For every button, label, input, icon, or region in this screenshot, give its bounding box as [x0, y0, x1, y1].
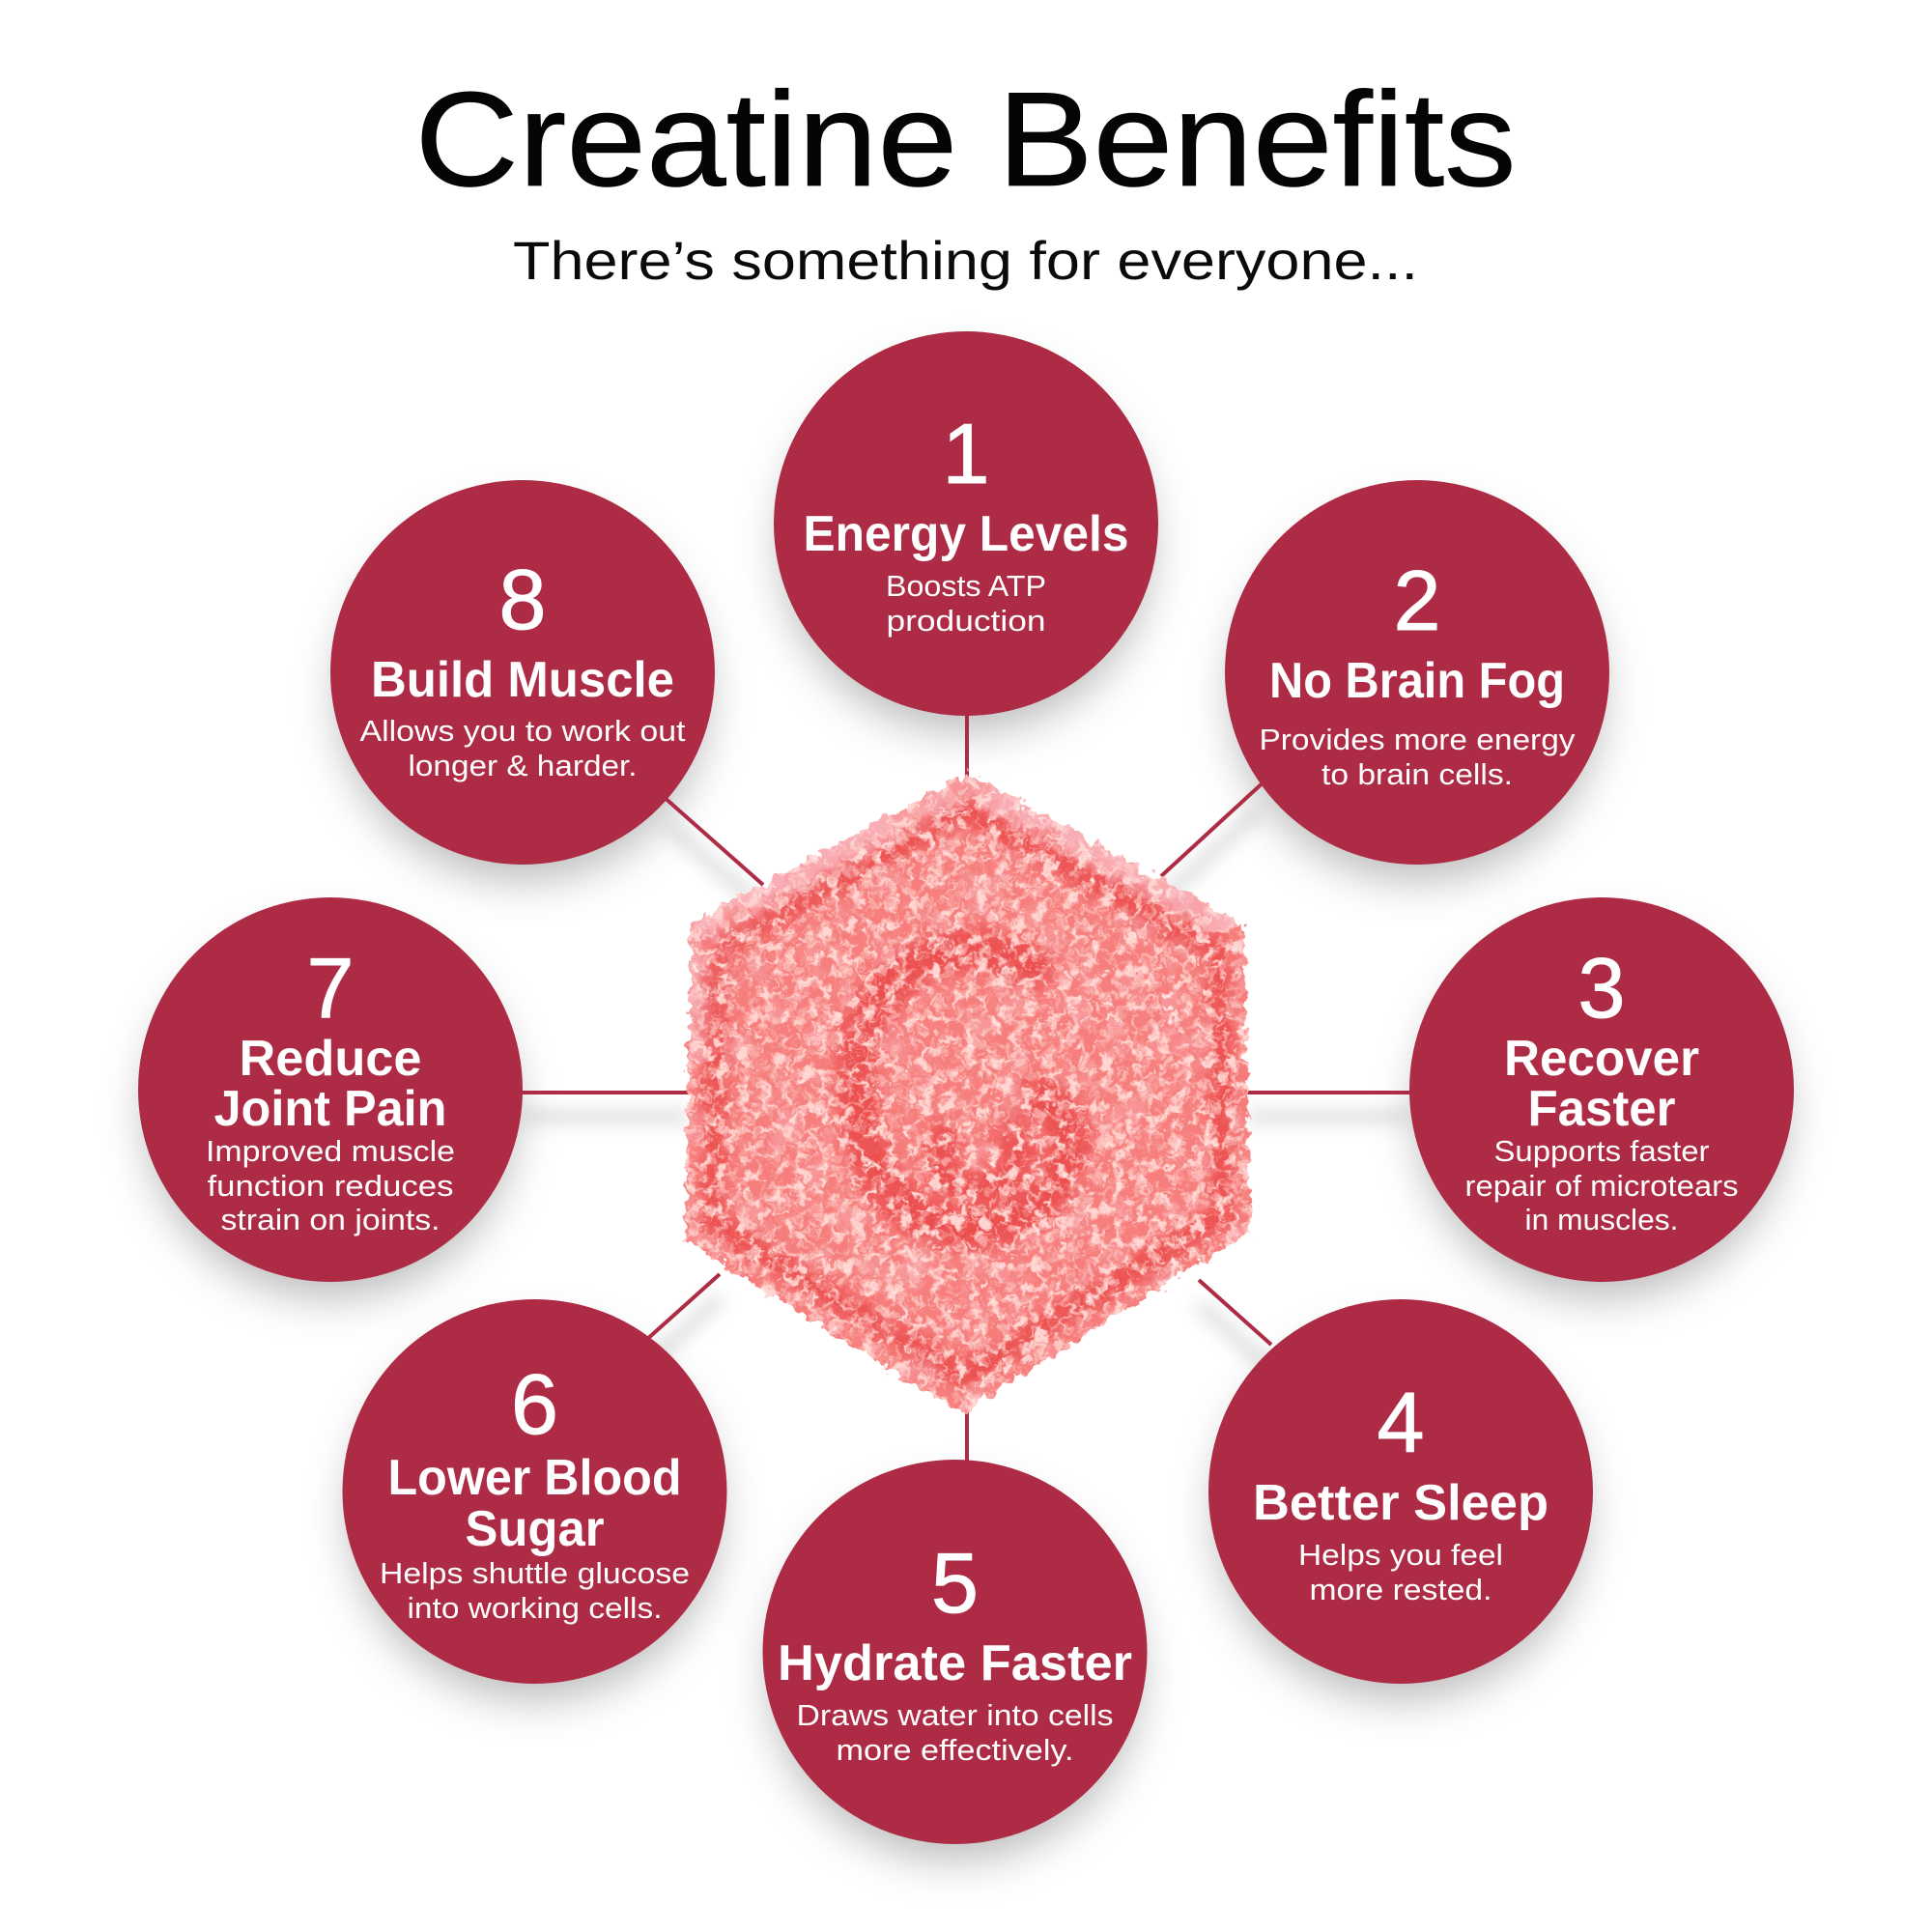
panel: benefit 8: Build Muscle — [371, 652, 674, 708]
panel: benefit 4 — [1208, 1299, 1593, 1684]
panel: benefit 5: Hydrate Faster — [778, 1635, 1132, 1691]
panel: benefit 7: Reduce — [240, 1031, 421, 1087]
darker blotches — [683, 777, 1249, 1414]
panel: benefit 8: longer & harder. — [408, 749, 638, 782]
panel: benefit 1: production — [887, 604, 1045, 638]
panel: benefit 6: into working cells. — [408, 1591, 663, 1625]
panel: benefit 3: Faster — [1528, 1081, 1675, 1137]
panel: benefit 2: to brain cells. — [1321, 757, 1513, 791]
panel: benefit 4: more rested. — [1310, 1573, 1492, 1606]
panel: benefit 3: Recover — [1504, 1031, 1699, 1087]
panel: benefit 3: 3 — [1578, 940, 1625, 1036]
panel: benefit 5: more effectively. — [837, 1733, 1074, 1767]
panel: benefit 7: strain on joints. — [220, 1203, 440, 1236]
panel: benefit 4: 4 — [1378, 1375, 1424, 1470]
panel: benefit 2: No Brain Fog — [1269, 653, 1565, 709]
panel: benefit 4: Helps you feel — [1298, 1538, 1503, 1572]
panel: benefit 3: Supports faster — [1493, 1134, 1710, 1168]
panel: benefit 8: Allows you to work out — [359, 714, 686, 748]
panel: benefit 5: 5 — [931, 1535, 979, 1631]
bright sugar highlights — [684, 768, 1252, 1408]
panel: benefit 5: Draws water into cells — [796, 1698, 1113, 1732]
panel: benefit 1: 1 — [943, 406, 989, 501]
panel: benefit 7 — [138, 897, 523, 1282]
panel: benefit 2: 2 — [1394, 553, 1440, 648]
panel: benefit 7: Improved muscle — [206, 1134, 455, 1168]
panel: benefit 3: repair of microtears — [1464, 1169, 1739, 1203]
central creatine gummy hexagon — [682, 768, 1254, 1414]
panel: benefit 6: Helps shuttle glucose — [380, 1556, 690, 1590]
panel: benefit 6: Sugar — [466, 1501, 605, 1557]
panel: benefit 6: 6 — [511, 1356, 558, 1452]
panel: benefit 3: in muscles. — [1524, 1203, 1679, 1236]
panel: benefit 7: function reduces — [207, 1169, 454, 1203]
panel: benefit 1 — [774, 331, 1158, 716]
panel: benefit 1: Energy Levels — [804, 506, 1128, 562]
panel: benefit 7: 7 — [307, 940, 354, 1036]
panel: benefit 8: 8 — [499, 552, 546, 647]
panel: benefit 4: Better Sleep — [1253, 1475, 1548, 1531]
connector shadows — [522, 810, 1410, 1369]
panel: benefit 2: Provides more energy — [1260, 723, 1576, 756]
panel: benefit 3 — [1409, 897, 1794, 1282]
embossed G mark — [857, 951, 1068, 1229]
panel: benefit 6: Lower Blood — [388, 1450, 682, 1506]
panel: benefit 2 — [1225, 480, 1609, 865]
circle shadows — [145, 361, 1787, 1861]
panel: benefit 7: Joint Pain — [214, 1081, 446, 1137]
connector lines — [517, 710, 1415, 1468]
subtitle: There’s something for everyone... — [513, 230, 1418, 291]
panel: benefit 1: Boosts ATP — [886, 569, 1046, 603]
title: Creatine Benefits — [415, 65, 1517, 214]
pale raised G stem — [917, 1005, 967, 1169]
panel: benefit 6 — [342, 1299, 726, 1684]
light top-left rim — [691, 773, 1244, 1063]
sugar crystal texture — [682, 775, 1252, 1414]
embossed inner hexagon ring — [713, 810, 1223, 1377]
panel: benefit 5 — [763, 1460, 1148, 1844]
panel: benefit 8 — [330, 480, 715, 865]
